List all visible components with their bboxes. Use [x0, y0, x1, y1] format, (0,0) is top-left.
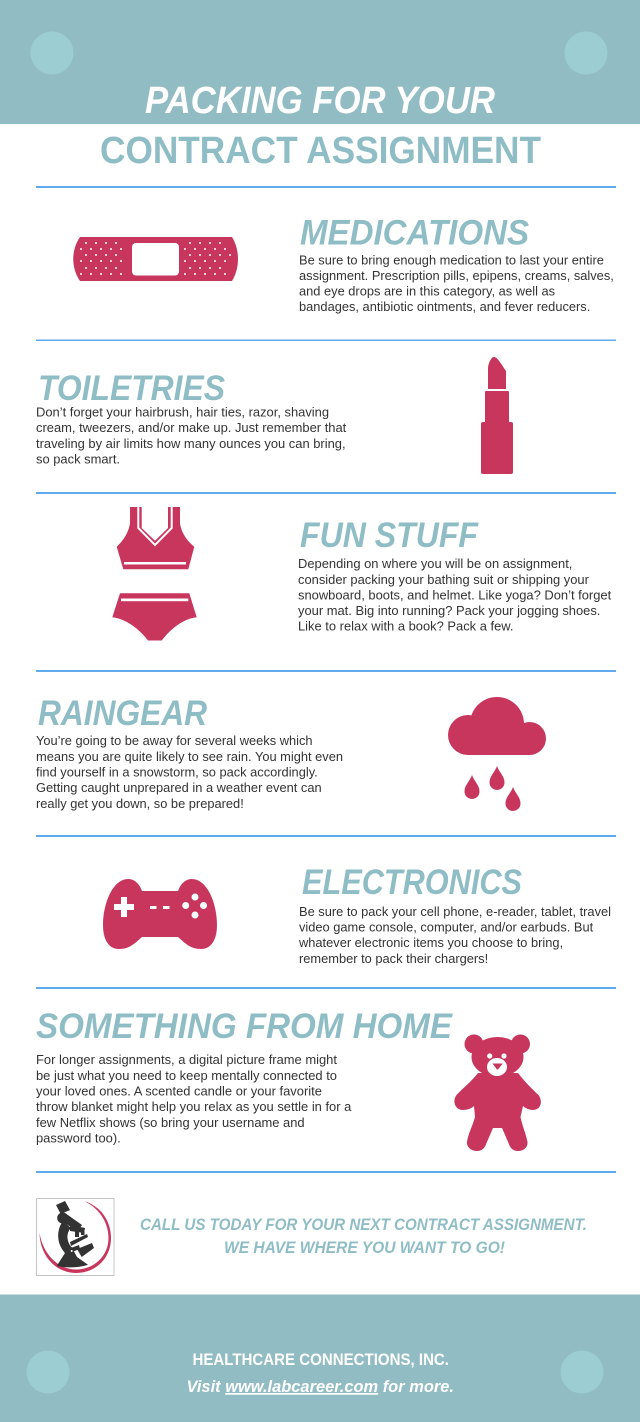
text: toiletries: Don’t forget your hairbrush, hair ties, razor, shaving [36, 404, 329, 420]
text: raingear: You’re going to be away for several weeks which [36, 733, 313, 748]
text: medications [299, 252, 614, 314]
text: electronics: whatever electronic items you choose to bring, [298, 935, 563, 950]
header band [0, 0, 640, 124]
icon: game controller [103, 879, 217, 949]
icon: lipstick [481, 357, 513, 474]
title: CONTRACT ASSIGNMENT [100, 130, 541, 172]
icon: swimsuit [112, 507, 197, 640]
text: raingear: really get you down, so be prepared! [36, 796, 244, 811]
title [100, 80, 541, 172]
text: medications: Be sure to bring enough medication to last your entire [299, 252, 604, 268]
heading: raingear: RAINGEAR [38, 694, 208, 733]
text: raingear: find yourself in a snowstorm, so pack accordingly. [36, 764, 318, 780]
call to action: WE HAVE WHERE YOU WANT TO GO! [224, 1238, 505, 1257]
heading: electronics: ELECTRONICS [302, 863, 522, 902]
call to action [140, 1215, 587, 1257]
footer text [186, 1350, 454, 1396]
footer text: HEALTHCARE CONNECTIONS, INC. [192, 1350, 449, 1369]
text: something from home: few Netflix shows (so bring your username and [36, 1115, 305, 1130]
text: electronics [298, 904, 611, 966]
text: fun stuff [298, 556, 612, 634]
title: PACKING FOR YOUR [145, 80, 496, 122]
text: toiletries: traveling by air limits how many ounces you can bring, [36, 436, 346, 451]
footer band [0, 1294, 640, 1422]
text: toiletries [36, 404, 347, 466]
heading: something from home: SOMETHING FROM HOME [36, 1007, 454, 1046]
microscope [56, 1201, 94, 1267]
logo ring [40, 1201, 111, 1273]
text: raingear: Getting caught unprepared in a weather event can [36, 780, 322, 795]
text: fun stuff: consider packing your bathing suit or shipping your [298, 572, 590, 587]
text: electronics: Be sure to pack your cell phone, e-reader, tablet, travel [299, 904, 611, 919]
call to action: CALL US TODAY FOR YOUR NEXT CONTRACT ASSIGNMENT. [140, 1215, 587, 1234]
heading: fun stuff: FUN STUFF [300, 516, 479, 555]
text: raingear: means you are quite likely to see rain. You might even [36, 749, 343, 764]
text: raingear [36, 733, 343, 811]
text: electronics: video game console, computer, and/or earbuds. But [299, 920, 594, 934]
icon: rain cloud [448, 697, 546, 811]
icon: bandage [73, 237, 238, 281]
text: electronics: remember to pack their chargers! [299, 951, 488, 966]
text: something from home: your loved ones. A scented candle or your favorite [36, 1084, 322, 1098]
text: something from home: throw blanket might help you relax as you settle in for a [36, 1099, 352, 1114]
footer text: Visit www.labcareer.com for more. [186, 1377, 454, 1396]
text: fun stuff: your mat. Big into running? Pack your jogging shoes. [298, 603, 600, 618]
text: something from home [36, 1052, 352, 1146]
heading: toiletries: TOILETRIES [38, 369, 225, 408]
text: something from home: password too). [36, 1130, 121, 1146]
text: medications: and eye drops are in this category, as well as [299, 284, 555, 298]
text: fun stuff: Like to relax with a book? Pack a few. [298, 618, 513, 634]
logo: microscope [36, 1198, 114, 1276]
text: fun stuff: Depending on where you will be on assignment, [298, 556, 572, 571]
text: something from home: be just what you need to keep mentally connected to [36, 1068, 337, 1083]
text: toiletries: cream, tweezers, and/or make up. Just remember that [36, 420, 347, 435]
text: toiletries: so pack smart. [36, 452, 120, 466]
icon: teddy bear [454, 1034, 541, 1151]
text: something from home: For longer assignments, a digital picture frame might [36, 1052, 337, 1067]
swimsuit top [117, 507, 194, 569]
heading: medications: MEDICATIONS [300, 214, 529, 252]
text: fun stuff: snowboard, boots, and helmet. Like yoga? Don’t forget [298, 588, 612, 602]
text: medications: bandages, antibiotic ointments, and fever reducers. [299, 299, 590, 314]
swimsuit bottom [112, 593, 197, 640]
text: medications: assignment. Prescription pills, epipens, creams, salves, [299, 268, 614, 283]
